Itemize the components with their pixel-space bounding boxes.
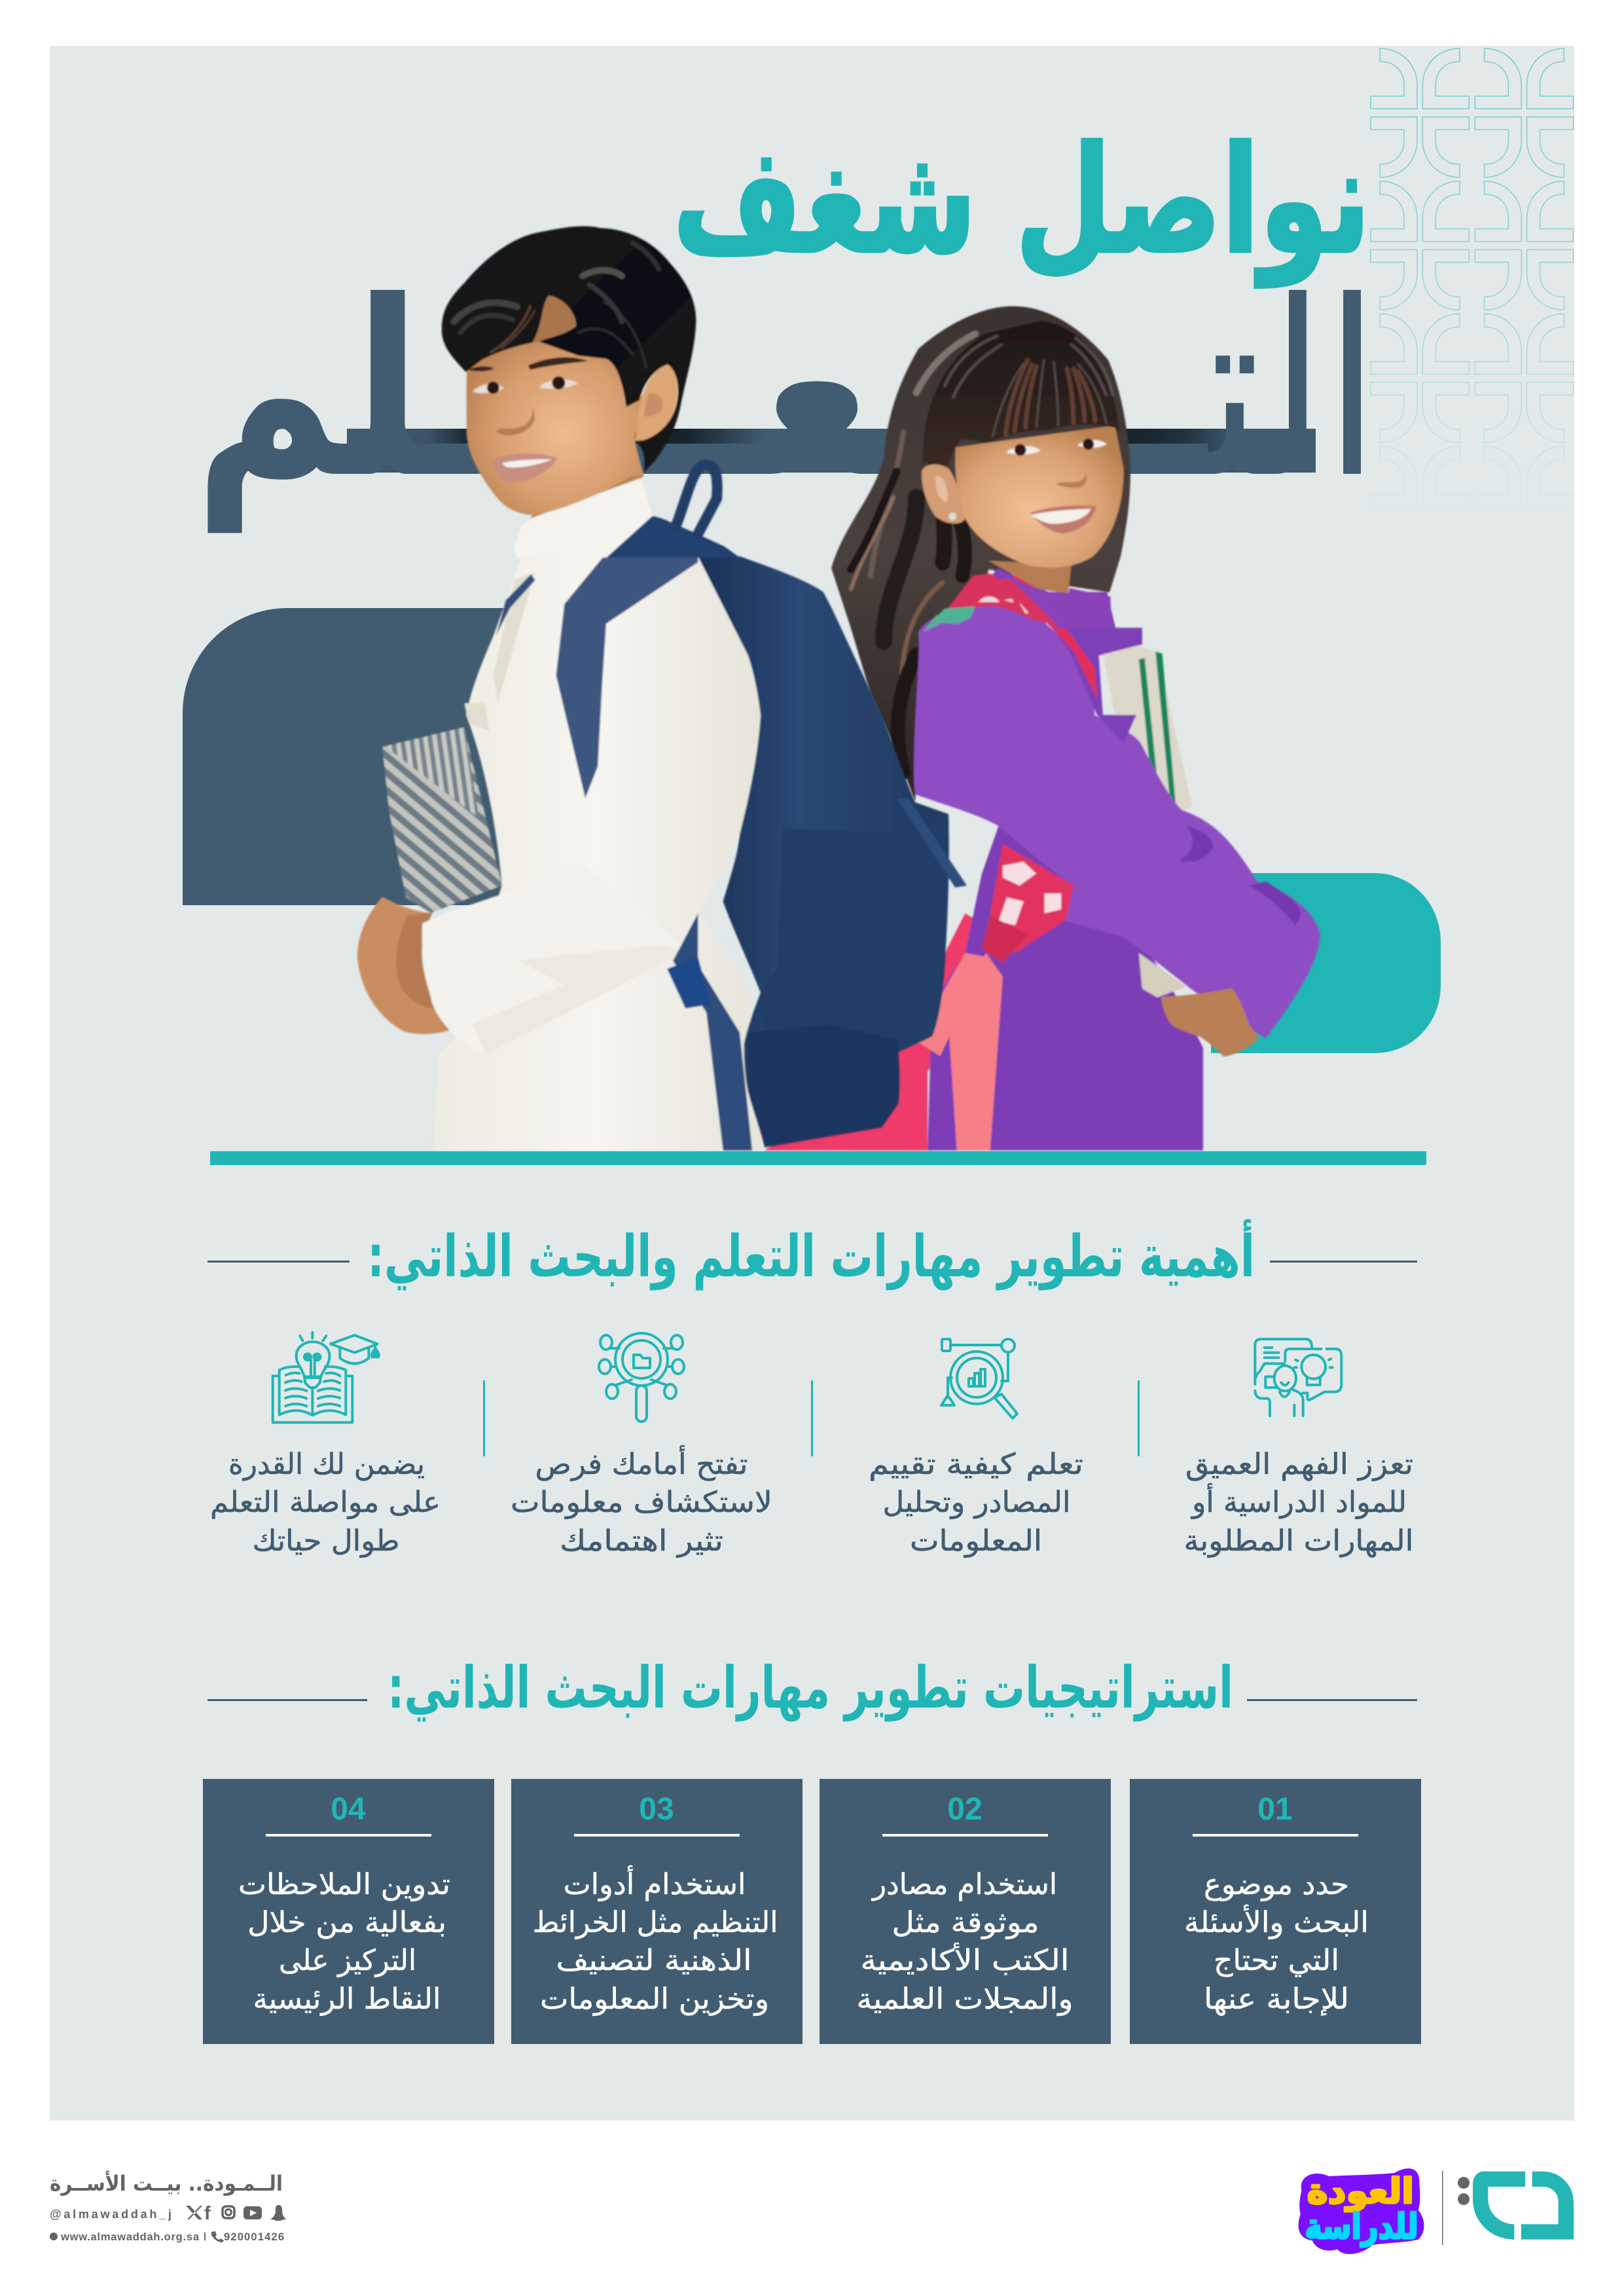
text: lifelong learning bbox=[210, 1448, 441, 1558]
text: deep understanding: للمواد الدراسية أو bbox=[1191, 1483, 1407, 1519]
heading: importance section: أهمية تطوير مهارات التعلم والبحث الذاتي: bbox=[367, 1219, 1255, 1291]
girl nose bbox=[1056, 467, 1087, 488]
separator 1 bbox=[1138, 1380, 1140, 1456]
shape: navy rounded block bbox=[183, 608, 524, 905]
boy ear bbox=[635, 365, 677, 440]
boy neck bbox=[530, 444, 643, 518]
thobe sleeve bbox=[422, 862, 690, 1054]
text: evaluate sources: تعلم كيفية تقييم bbox=[869, 1448, 1083, 1481]
card 04: تدوين الملاحظات bbox=[238, 1868, 450, 1901]
divider: teal bar under photo bbox=[210, 1151, 1426, 1165]
girl ear bbox=[922, 465, 965, 524]
books bbox=[1103, 645, 1192, 814]
girl neck bbox=[988, 561, 1072, 594]
column: explore information bbox=[511, 1333, 772, 1558]
strap loop bbox=[676, 465, 717, 533]
column: evaluate sources bbox=[869, 1339, 1083, 1558]
boy hair bbox=[442, 226, 696, 473]
boy mouth bbox=[492, 454, 558, 482]
footer: brand contact: www.almawaddah.org.sa bbox=[60, 2231, 200, 2243]
green strap patch bbox=[924, 602, 986, 632]
bang highlights bbox=[945, 336, 1113, 437]
bag spots bbox=[999, 862, 1061, 925]
text: deep understanding: المهارات المطلوبة bbox=[1183, 1524, 1414, 1558]
green strap bbox=[931, 607, 975, 624]
title: kashida bar of second line bbox=[347, 429, 1316, 473]
card 04 bbox=[203, 1779, 494, 2044]
strap print bbox=[979, 596, 1029, 613]
icon: magnifier with nodes bbox=[599, 1333, 684, 1422]
card 02: والمجلات العلمية bbox=[856, 1982, 1074, 2016]
text: explore information: تثير اهتمامك bbox=[560, 1524, 723, 1558]
logo: back to school sticker: للدراسة bbox=[1305, 2206, 1418, 2247]
separator 2 bbox=[811, 1380, 813, 1456]
backpack top bbox=[604, 516, 740, 558]
footer: brand contact: @almawaddah_j bbox=[50, 2208, 171, 2221]
bag print strap on side bbox=[990, 844, 1074, 953]
card 03: استخدام أدوات bbox=[563, 1865, 746, 1901]
card 03: التنظيم مثل الخرائط bbox=[533, 1906, 778, 1939]
text: evaluate sources: المعلومات bbox=[910, 1524, 1042, 1558]
text: deep understanding bbox=[1183, 1448, 1414, 1558]
boy collar bbox=[514, 479, 653, 558]
purple shoulder bbox=[967, 606, 1049, 630]
sleeve folds bbox=[1178, 826, 1301, 925]
boy thobe bbox=[433, 554, 763, 1151]
forehead patch bbox=[532, 296, 576, 342]
girl hair bbox=[831, 306, 1130, 802]
coral strap bbox=[948, 953, 1003, 1151]
girl body and bag bbox=[765, 568, 1320, 1151]
card 02: موثوقة مثل bbox=[892, 1906, 1039, 1939]
title: second line: التـــــعـــــلم bbox=[194, 250, 1379, 534]
photo: girl bbox=[765, 306, 1320, 1151]
side strap bbox=[897, 798, 967, 888]
logo: back to school sticker: العودة bbox=[1307, 2170, 1414, 2212]
heading: strategies section: استراتيجيات تطوير مهارات البحث الذاتي: bbox=[388, 1654, 1233, 1722]
boy face bbox=[467, 332, 643, 515]
card 02: استخدام مصادر bbox=[871, 1868, 1057, 1901]
shape: teal rounded block bbox=[1211, 873, 1441, 1053]
pink shoulder strap bbox=[986, 574, 1097, 699]
card 03: 03 bbox=[639, 1792, 674, 1827]
card 01: التي تحتاج bbox=[1214, 1944, 1339, 1977]
text: lifelong learning: على مواصلة التعلم bbox=[210, 1486, 441, 1519]
text: deep understanding: تعزز الفهم العميق bbox=[1185, 1448, 1413, 1481]
logo: back to school sticker bbox=[1299, 2168, 1424, 2254]
logo separator bbox=[1442, 2171, 1443, 2245]
card 02: الكتب الأكاديمية bbox=[860, 1942, 1070, 1977]
lower strap bbox=[673, 913, 752, 1151]
column: deep understanding bbox=[1183, 1339, 1414, 1558]
card 04: بفعالية من خلال bbox=[247, 1906, 446, 1939]
photo: boy bbox=[357, 226, 967, 1151]
card 03 bbox=[511, 1779, 803, 2044]
buckle bbox=[982, 915, 1028, 963]
column: lifelong learning bbox=[210, 1333, 441, 1558]
text: lifelong learning: يضمن لك القدرة bbox=[228, 1448, 425, 1481]
text: explore information bbox=[511, 1445, 772, 1558]
decorative pattern: top right bbox=[1371, 48, 1574, 507]
purple sleeve bbox=[914, 604, 1320, 1038]
separator 3 bbox=[483, 1380, 485, 1456]
girl pink strap bbox=[936, 574, 1058, 626]
left strap bbox=[496, 574, 535, 636]
boy nose bbox=[496, 407, 535, 435]
boy eyebrows bbox=[468, 357, 588, 371]
card 02: 02 bbox=[947, 1792, 983, 1827]
girl bangs bbox=[923, 321, 1119, 467]
girl hand bbox=[1161, 989, 1259, 1057]
card 01: البحث والأسئلة bbox=[1184, 1904, 1369, 1939]
card 03: وتخزين المعلومات bbox=[540, 1982, 769, 2016]
icon: person with ideas bbox=[1255, 1339, 1341, 1416]
backpack pocket bbox=[761, 814, 949, 1052]
card 01: للإجابة عنها bbox=[1204, 1982, 1349, 2016]
girl hair strands bbox=[851, 334, 975, 772]
pink bag bbox=[765, 913, 999, 1151]
sleeve folds bbox=[473, 945, 690, 1054]
card 04: 04 bbox=[331, 1792, 366, 1827]
girl mouth bbox=[1030, 505, 1096, 533]
earring bbox=[948, 512, 956, 520]
boy eyes bbox=[473, 384, 504, 393]
card 02 bbox=[820, 1779, 1111, 2044]
text: evaluate sources: المصادر وتحليل bbox=[882, 1486, 1071, 1519]
text: explore information: لاستكشاف معلومات bbox=[511, 1486, 772, 1519]
boy hands bbox=[357, 897, 449, 1034]
backpack bbox=[698, 556, 949, 1147]
card 01 bbox=[1130, 1779, 1421, 2044]
logo: Almawaddah mark bbox=[1458, 2172, 1574, 2240]
collar ruffle bbox=[965, 568, 1142, 743]
footer: brand contact: 920001426 bbox=[224, 2231, 284, 2243]
backpack lower pocket bbox=[748, 1024, 898, 1147]
girl collar bbox=[988, 567, 1111, 628]
title: first line: نواصل شغف bbox=[673, 115, 1371, 287]
social icons: f bbox=[204, 2203, 211, 2224]
boy striped book bbox=[382, 727, 502, 913]
card 04: التركيز على bbox=[279, 1944, 416, 1977]
text: explore information: تفتح أمامك فرص bbox=[535, 1445, 748, 1481]
card 01: 01 bbox=[1257, 1792, 1293, 1827]
icon: book bulb and cap bbox=[273, 1333, 379, 1422]
footer: brand contact: الــمـودة.. بيــت الأســرة bbox=[50, 2170, 283, 2196]
shoulder strap bbox=[556, 556, 698, 798]
social icons bbox=[186, 2203, 286, 2224]
text: lifelong learning: طوال حياتك bbox=[253, 1524, 399, 1558]
dress skirt bbox=[928, 826, 1203, 1151]
footer: brand contact bbox=[50, 2170, 286, 2243]
icon: analysis magnifier bbox=[941, 1339, 1017, 1418]
girl eyes bbox=[1006, 446, 1041, 454]
card 03: الذهنية لتصنيف bbox=[556, 1944, 751, 1977]
hair highlights bbox=[454, 243, 659, 368]
card 01: حدد موضوع bbox=[1204, 1868, 1349, 1901]
text: evaluate sources bbox=[869, 1448, 1083, 1558]
card 04: النقاط الرئيسية bbox=[253, 1982, 441, 2016]
buckle bbox=[667, 957, 710, 1009]
girl face bbox=[955, 425, 1124, 567]
